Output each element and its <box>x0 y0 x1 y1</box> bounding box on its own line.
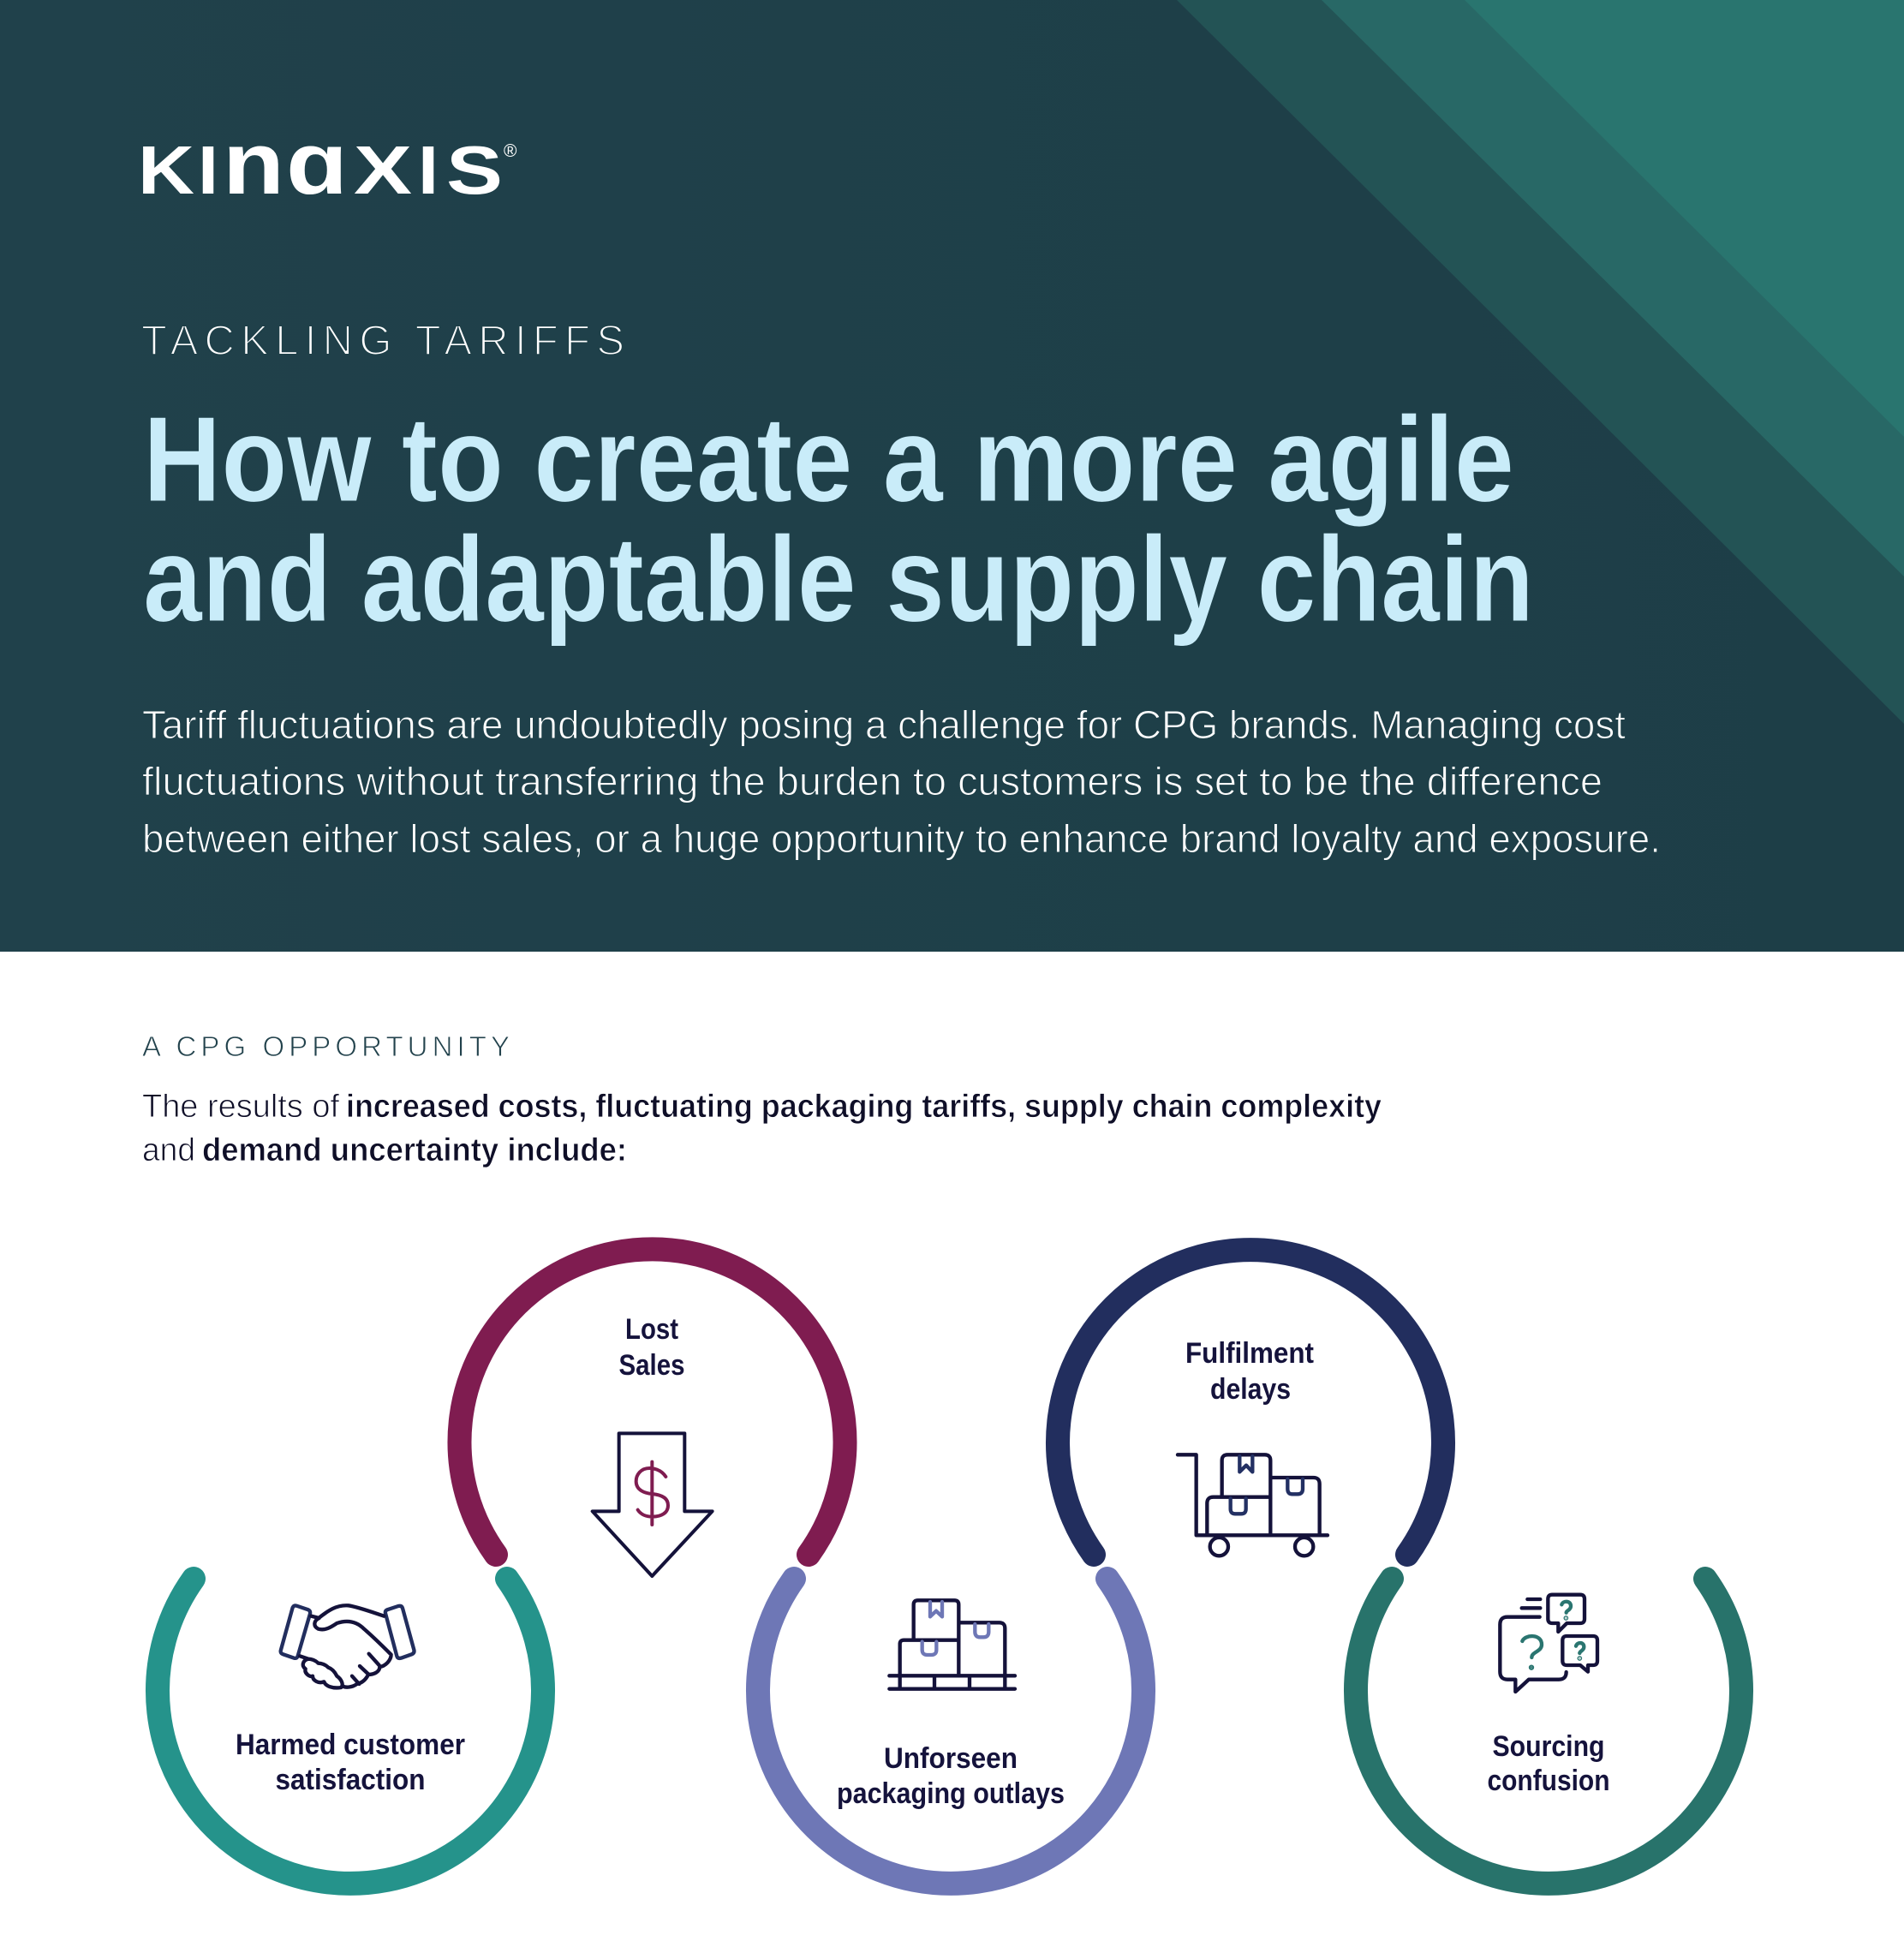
label: sourcing confusion <box>1487 1730 1610 1797</box>
logo: Kinaxis wordmark: I <box>198 132 218 208</box>
label: fulfilment delays <box>1185 1337 1314 1406</box>
icon: handshake <box>281 1605 415 1687</box>
label: harmed customer satisfaction <box>236 1729 465 1796</box>
label: harmed customer satisfaction: satisfaction <box>276 1764 425 1796</box>
logo: Kinaxis wordmark: S <box>446 132 503 208</box>
icon: question speech bubbles <box>1500 1595 1597 1692</box>
logo: Kinaxis wordmark: ɑ <box>286 114 348 212</box>
arc: unforseen packaging outlays <box>758 1579 1143 1884</box>
label: fulfilment delays: Fulfilment <box>1185 1337 1314 1370</box>
label: fulfilment delays: delays <box>1210 1373 1291 1406</box>
section intro text: and <box>142 1132 195 1168</box>
title: How to create a more agile <box>143 391 1514 528</box>
intro paragraph: between either lost sales, or a huge opportunity to enhance brand loyalty and exposure. <box>142 816 1661 861</box>
section intro text <box>142 1089 1382 1168</box>
eyebrow: tackling tariffs: TACKLING TARIFFS <box>141 318 624 364</box>
label: sourcing confusion: confusion <box>1487 1765 1610 1797</box>
label: harmed customer satisfaction: Harmed customer <box>236 1729 465 1761</box>
arc: harmed customer satisfaction <box>158 1579 543 1884</box>
arc: fulfilment delays <box>1058 1250 1443 1555</box>
section intro text: increased costs, fluctuating packaging tariffs, supply chain complexity <box>346 1089 1382 1125</box>
label: unforseen packaging outlays: Unforseen <box>884 1742 1018 1775</box>
label: unforseen packaging outlays: packaging outlays <box>837 1777 1065 1810</box>
icon: boxes on pallet <box>889 1600 1015 1689</box>
title: and adaptable supply chain <box>143 511 1534 648</box>
logo: Kinaxis wordmark: K <box>138 132 194 208</box>
logo: Kinaxis wordmark: X <box>354 132 412 208</box>
section intro text: demand uncertainty include: <box>202 1132 627 1168</box>
intro paragraph: fluctuations without transferring the burden to customers is set to be the difference <box>142 759 1603 803</box>
intro paragraph: Tariff fluctuations are undoubtedly posing a challenge for CPG brands. Managing cost <box>142 702 1626 747</box>
logo: Kinaxis wordmark: n <box>223 114 284 212</box>
section intro text: The results of <box>142 1089 339 1125</box>
title <box>143 391 1534 648</box>
logo: Kinaxis wordmark: I <box>418 132 439 208</box>
logo: Kinaxis wordmark: ® <box>504 141 517 161</box>
label: lost sales: Sales <box>618 1349 685 1382</box>
icon: boxes on trolley <box>1178 1454 1328 1556</box>
label: sourcing confusion: Sourcing <box>1492 1730 1605 1763</box>
label: lost sales <box>618 1313 685 1382</box>
logo: Kinaxis wordmark <box>138 114 517 212</box>
arc: lost sales <box>460 1249 845 1555</box>
section label: a CPG opportunity: A CPG OPPORTUNITY <box>142 1030 510 1062</box>
arc: sourcing confusion <box>1356 1579 1741 1884</box>
label: unforseen packaging outlays <box>837 1742 1065 1810</box>
intro paragraph <box>142 702 1661 861</box>
panel: header background with diagonal bands <box>0 0 1904 952</box>
icon: down arrow with dollar <box>593 1433 713 1576</box>
label: lost sales: Lost <box>625 1313 678 1346</box>
